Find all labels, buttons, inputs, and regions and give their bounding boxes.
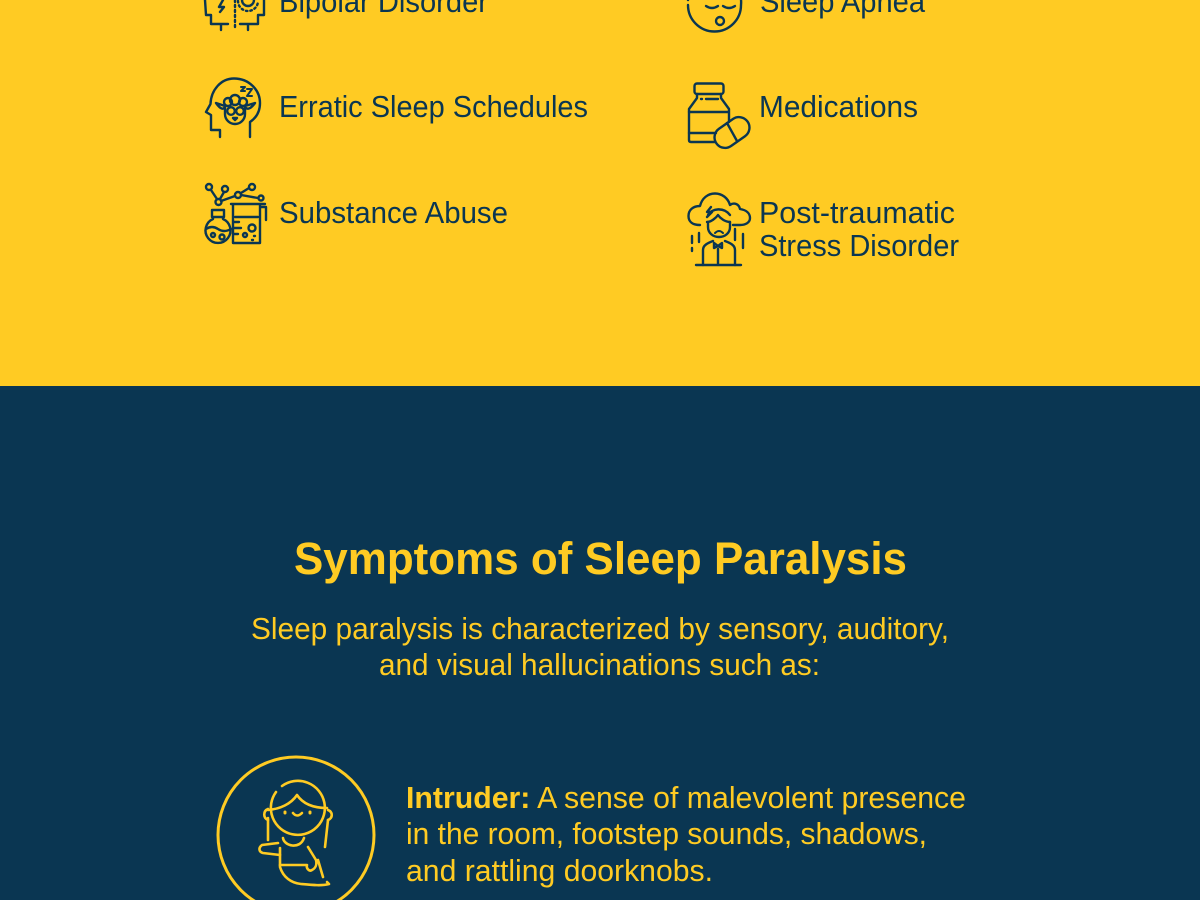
icon: medication bottle and pill	[689, 84, 754, 152]
text block: introduction: Sleep paralysis is characterized by sensory, auditory,	[251, 611, 949, 646]
label: erratic sleep schedules: Erratic Sleep Schedules	[279, 89, 588, 124]
label: medications: Medications	[759, 89, 918, 124]
text block: intruder description: and rattling doorknobs.	[406, 853, 713, 888]
text block: intruder description	[406, 780, 966, 888]
icon: bipolar disorder heads	[205, 0, 264, 30]
text block: intruder description: in the room, footstep sounds, shadows,	[406, 816, 927, 851]
panel: symptoms	[0, 386, 1200, 900]
text block: introduction	[251, 611, 949, 682]
text block: intruder description: Intruder: A sense of malevolent presence	[406, 780, 966, 815]
heading: symptoms of sleep paralysis: Symptoms of Sleep Paralysis	[294, 533, 907, 584]
icon: sleep apnea face	[688, 0, 741, 32]
label: substance abuse: Substance Abuse	[279, 195, 508, 230]
label: post-traumatic stress disorder	[759, 195, 959, 263]
label: post-traumatic stress disorder: Post-traumatic	[759, 195, 955, 230]
panel: causes	[0, 0, 1200, 386]
icon: lab flask and beaker	[205, 184, 266, 243]
icon: sheep in head	[206, 78, 260, 137]
icon: intruder figure in circle	[218, 757, 374, 900]
label: post-traumatic stress disorder: Stress Disorder	[759, 228, 959, 263]
icon: stressed person under cloud	[688, 194, 750, 265]
text block: introduction: and visual hallucinations such as:	[379, 647, 820, 682]
